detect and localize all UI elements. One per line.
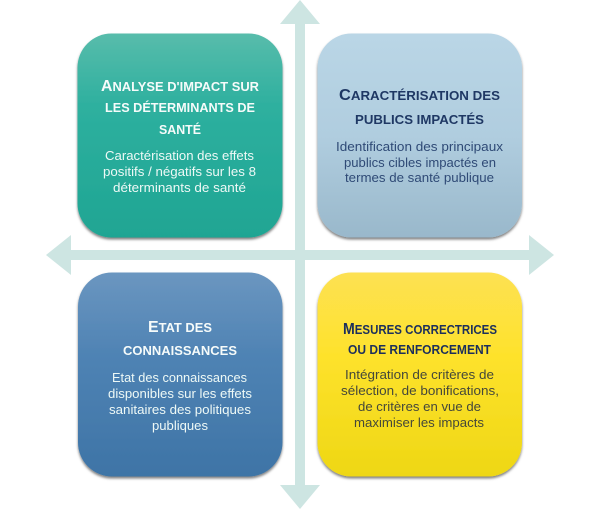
text: mesures correctrices description: sélection, de bonifications, <box>341 384 499 398</box>
panel: état des connaissances <box>78 272 282 476</box>
arrow: vertical double-headed axis <box>280 0 320 509</box>
text: caractérisation description: publics cibles impactés en <box>344 156 496 170</box>
heading: analyse d'impact: ANALYSE D'IMPACT SUR <box>101 78 259 95</box>
text: état des connaissances description <box>108 371 252 433</box>
text: mesures correctrices description: Intégration de critères de <box>345 368 494 382</box>
text: caractérisation description: termes de santé publique <box>345 171 494 185</box>
heading: analyse d'impact <box>101 78 259 137</box>
text: caractérisation description: Identification des principaux <box>336 140 504 154</box>
text: mesures correctrices description: maximiser les impacts <box>354 416 484 430</box>
text: analyse d'impact description: positifs / négatifs sur les 8 <box>103 165 256 179</box>
heading: état des connaissances <box>123 319 237 358</box>
panel: analyse d'impact <box>78 34 282 238</box>
heading: caractérisation des publics <box>339 87 500 127</box>
text: analyse d'impact description: Caractérisation des effets <box>105 149 254 163</box>
text: état des connaissances description: sanitaires des politiques <box>109 403 251 417</box>
heading: état des connaissances: ETAT DES <box>148 319 212 336</box>
text: mesures correctrices description: de critères en vue de <box>358 400 481 414</box>
panel: mesures correctrices <box>318 272 522 476</box>
text: état des connaissances description: Etat des connaissances <box>112 371 247 385</box>
heading: analyse d'impact: LES DÉTERMINANTS DE <box>105 100 255 115</box>
text: caractérisation description <box>336 140 504 185</box>
text: mesures correctrices description <box>341 368 499 430</box>
heading: caractérisation des publics: CARACTÉRISATION DES <box>339 87 500 104</box>
text: analyse d'impact description: déterminants de santé <box>113 181 246 195</box>
heading: analyse d'impact: SANTÉ <box>159 122 201 137</box>
arrow: horizontal double-headed axis <box>46 235 554 275</box>
heading: mesures correctrices: MESURES CORRECTRICES <box>343 321 497 338</box>
heading: caractérisation des publics: PUBLICS IMPACTÉS <box>355 112 484 127</box>
text: analyse d'impact description <box>103 149 256 195</box>
heading: état des connaissances: CONNAISSANCES <box>123 344 237 358</box>
panel: caractérisation des publics <box>318 34 522 238</box>
heading: mesures correctrices: OU DE RENFORCEMENT <box>348 343 491 357</box>
heading: mesures correctrices <box>343 321 497 357</box>
text: état des connaissances description: publiques <box>152 419 208 433</box>
text: état des connaissances description: disponibles sur les effets <box>108 387 252 401</box>
